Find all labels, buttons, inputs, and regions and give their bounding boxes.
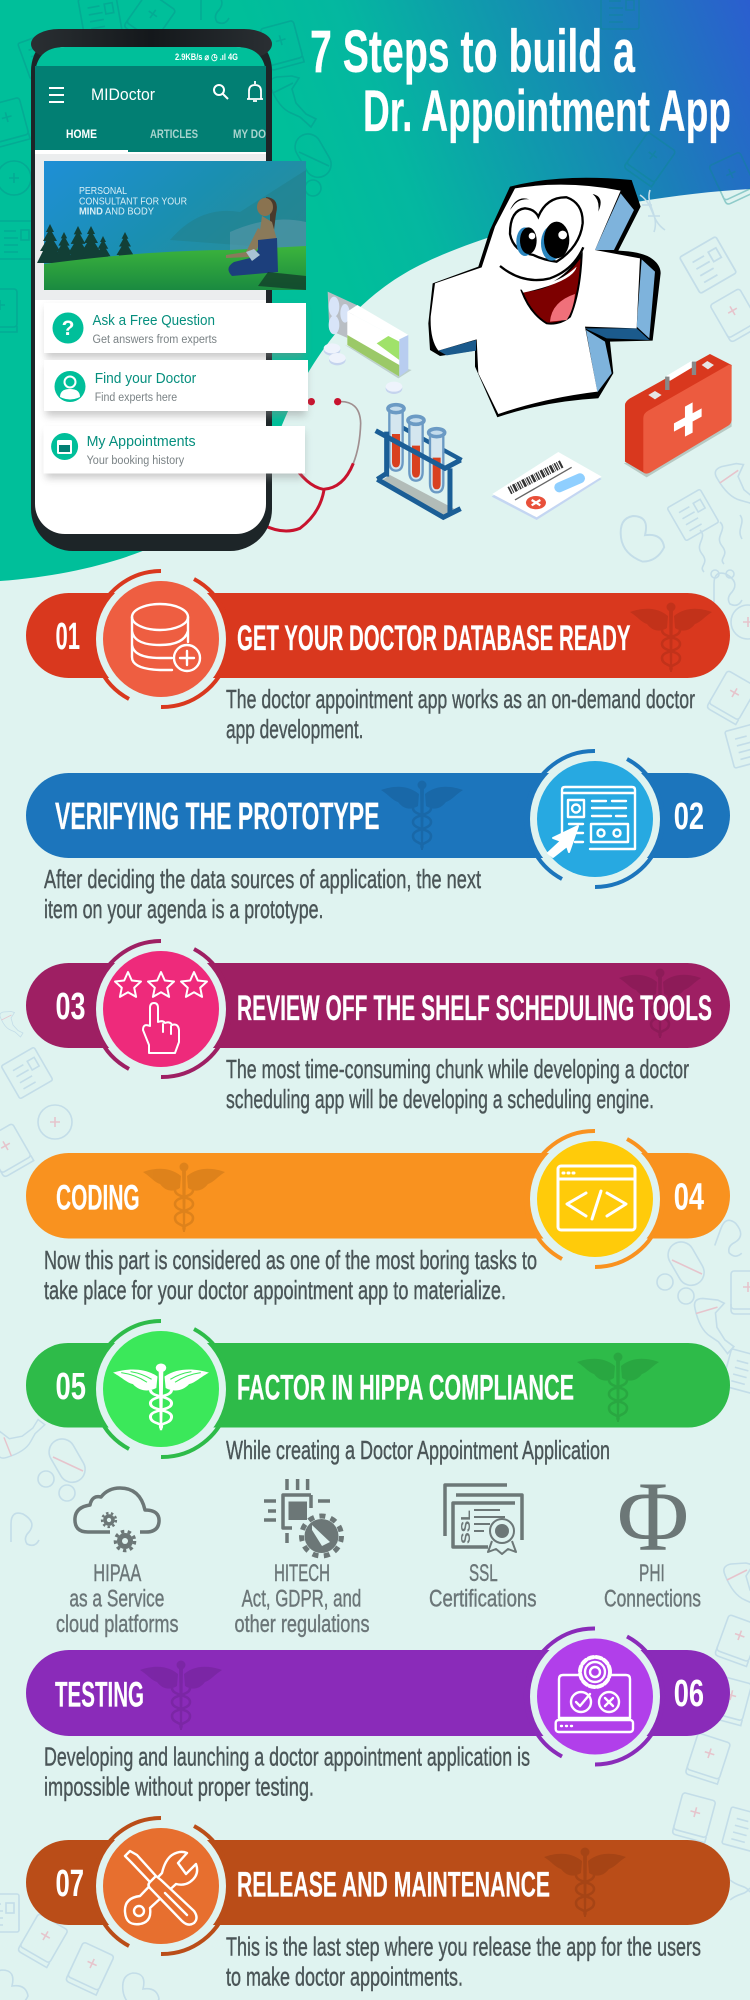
mascot eyes (510, 197, 583, 262)
icon: chip with gear (264, 1479, 342, 1556)
step 1 badge (93, 571, 230, 707)
phone (31, 29, 272, 551)
step 2 heading: VERIFYING THE PROTOTYPE (55, 796, 380, 838)
step 1 description: app development. (226, 714, 364, 744)
first aid kit (624, 354, 732, 477)
banner (37, 161, 306, 290)
status bar (35, 47, 266, 77)
step 1 (26, 571, 730, 744)
step 6 bar (26, 1650, 730, 1736)
step 3 (26, 941, 730, 1114)
step 6 description (44, 1742, 530, 1802)
phone body (31, 29, 272, 551)
HITECH label: HITECH (274, 1560, 330, 1587)
HIPAA label: HIPAA (93, 1560, 141, 1587)
question icon: ? (62, 317, 74, 340)
step 3 bar (26, 963, 730, 1048)
step 1 description (226, 684, 695, 744)
step 7 description: to make doctor appointments. (226, 1962, 463, 1992)
step 1 caduceus watermark (630, 602, 712, 672)
PHI label: Connections (604, 1586, 701, 1612)
step 4 (26, 1131, 730, 1305)
card: find your doctor (44, 360, 308, 416)
step 7 description (226, 1932, 701, 1992)
step 2 description: After deciding the data sources of application, the next (44, 864, 482, 894)
banner mountains (170, 170, 306, 250)
icon: SSL certificate: SSL (458, 1510, 473, 1544)
step 5 caduceus watermark (577, 1352, 659, 1422)
step 4 bar (26, 1153, 730, 1238)
SSL label: Certifications (429, 1586, 537, 1612)
HIPAA label (56, 1560, 178, 1638)
icon: caduceus (113, 1363, 209, 1430)
step 2 description: item on your agenda is a prototype. (44, 894, 324, 924)
card: find your doctor: Find experts here (95, 392, 177, 404)
icon: cloud with gears (75, 1488, 159, 1551)
app name: MIDoctor (91, 85, 155, 104)
step 6 badge (526, 1628, 663, 1764)
step 3 badge (93, 941, 230, 1077)
card: ask a free question: Get answers from experts (92, 334, 217, 346)
step 3 description (226, 1054, 689, 1114)
card: my appointments (44, 426, 305, 478)
icon: database (132, 604, 200, 671)
step 7 heading: RELEASE AND MAINTENANCE (237, 1866, 550, 1905)
status bar: 2.9KB/s ⌀ ◷ .ıl 4G (175, 52, 238, 62)
title (310, 18, 731, 144)
medicine box and pills (324, 292, 412, 394)
icon: phi symbol: Φ (617, 1461, 689, 1572)
step 4 description (44, 1245, 537, 1305)
step 5 bar (26, 1343, 730, 1428)
banner text (79, 186, 187, 218)
step 7 number: 07 (56, 1863, 84, 1905)
step 2 badge (526, 751, 663, 887)
step 5 number: 05 (56, 1366, 86, 1408)
banner text: CONSULTANT FOR YOUR (79, 196, 187, 208)
step 7 (26, 1818, 730, 1992)
question icon (52, 312, 84, 344)
PHI label (604, 1560, 701, 1612)
step 7 caduceus watermark (544, 1848, 626, 1917)
mascot blue sides (438, 193, 655, 392)
step 5 (26, 1321, 730, 1465)
PHI label: PHI (639, 1560, 665, 1587)
card text: Ask a Free Question (92, 312, 215, 329)
icon: code window (558, 1166, 635, 1230)
step 4 description: Now this part is considered as one of the most boring tasks to (44, 1245, 537, 1275)
step 1 number: 01 (56, 616, 80, 658)
phone screen (35, 47, 266, 534)
step 3 number: 03 (56, 986, 86, 1028)
step 4 badge (526, 1131, 663, 1267)
mascot brows (510, 194, 601, 212)
card text: Find your Doctor (95, 370, 196, 387)
compliance item: PHI (604, 1461, 701, 1612)
banner text: MIND AND BODY (79, 206, 154, 218)
card: ask a free question (44, 303, 306, 358)
compliance item: SSL (429, 1485, 537, 1612)
SSL label (429, 1560, 537, 1612)
icon: cursor (548, 826, 578, 857)
tabs: HOME (66, 129, 97, 141)
doctor icon (54, 371, 86, 402)
mascot mouth (500, 247, 583, 324)
step 1 bar (26, 593, 730, 678)
banner text: PERSONAL (79, 186, 127, 197)
calendar icon (51, 433, 78, 460)
background icons: header (0, 0, 750, 332)
step 2 caduceus watermark (381, 780, 463, 850)
banner trees (37, 224, 136, 267)
ID card (492, 452, 602, 520)
step 6 description: impossible without proper testing. (44, 1772, 314, 1802)
HIPAA label: cloud platforms (56, 1611, 178, 1638)
tabs: MY DO (233, 129, 266, 141)
bell icon (247, 81, 263, 101)
step 4 description: take place for your doctor appointment app to materialize. (44, 1275, 506, 1305)
step 4 heading: CODING (56, 1178, 140, 1218)
search icon (214, 85, 228, 99)
step 6 (26, 1628, 730, 1802)
mascot white front (431, 185, 640, 414)
step 2 number: 02 (674, 796, 704, 838)
card text: My Appointments (87, 433, 196, 450)
icon: stars and hand (115, 972, 207, 1053)
card: my appointments: Your booking history (87, 455, 184, 467)
step 2 description (44, 864, 482, 924)
step 7 bar (26, 1840, 730, 1925)
tabs (66, 129, 266, 141)
stethoscope (263, 398, 361, 531)
test tube rack (376, 405, 462, 520)
step 4 caduceus watermark (143, 1162, 225, 1232)
app bar (35, 66, 266, 152)
step 6 description: Developing and launching a doctor appointment application is (44, 1742, 530, 1772)
step 2 bar (26, 773, 730, 858)
icon: laptop with gear (556, 1657, 633, 1732)
compliance item: HITECH (234, 1479, 370, 1638)
header background shape (0, 0, 750, 581)
HITECH label (234, 1560, 370, 1638)
step 3 caduceus watermark (619, 968, 701, 1038)
HITECH label: other regulations (234, 1611, 370, 1638)
tabs: ARTICLES (150, 129, 198, 141)
icon: wrench and screwdriver (125, 1851, 197, 1925)
banner woman (226, 197, 306, 290)
mascot silhouette (428, 178, 661, 417)
step 6 heading: TESTING (55, 1676, 144, 1715)
step 7 badge (93, 1818, 230, 1954)
compliance item: HIPAA (56, 1488, 178, 1638)
mascot: smiling cross (428, 178, 661, 417)
HITECH label: Act, GDPR, and (242, 1586, 361, 1612)
banner hill (44, 246, 306, 290)
step 4 number: 04 (674, 1176, 704, 1218)
menu icon (49, 88, 64, 102)
step 6 number: 06 (674, 1673, 704, 1715)
icon: prototype window (562, 787, 635, 849)
step 6 caduceus watermark (140, 1660, 222, 1730)
step 2 (26, 751, 730, 924)
HIPAA label: as a Service (69, 1586, 164, 1612)
step 5 badge (93, 1321, 230, 1457)
SSL label: SSL (469, 1560, 498, 1587)
